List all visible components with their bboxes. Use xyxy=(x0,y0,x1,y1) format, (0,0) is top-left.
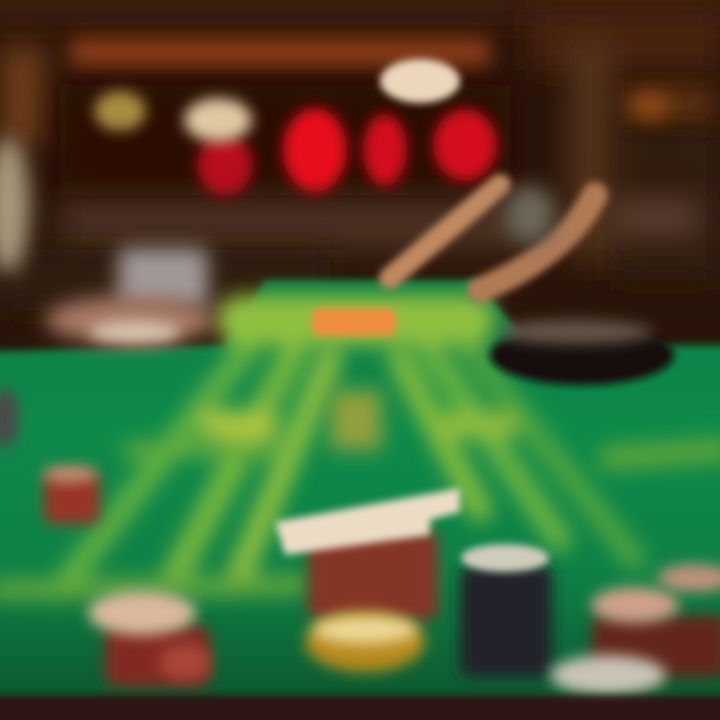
figure: person at far left xyxy=(0,137,30,273)
white lights: lamps above machines xyxy=(94,59,668,142)
chip stack: dark navy xyxy=(460,544,552,677)
table markings: radiating yellow-green lines xyxy=(0,320,720,590)
background wall: upper room tones xyxy=(0,0,720,310)
chip stack: lower left red xyxy=(88,591,211,687)
chip stack: central red and white xyxy=(275,488,460,672)
chip stack: right red xyxy=(550,564,720,695)
figure: torso behind arms xyxy=(504,185,556,245)
marker: orange betting box xyxy=(312,308,396,336)
chip stack: small red left xyxy=(42,466,100,524)
arms: reaching player arms xyxy=(390,185,595,290)
red lights: slot machines xyxy=(197,108,497,195)
cards: pile on left of table xyxy=(45,248,215,344)
chip: gray at left edge xyxy=(0,388,19,448)
table center: olive patch xyxy=(330,390,382,450)
table edge: dark foreground rail xyxy=(0,696,720,720)
table: green felt xyxy=(0,280,720,700)
object: black disc xyxy=(490,320,674,385)
